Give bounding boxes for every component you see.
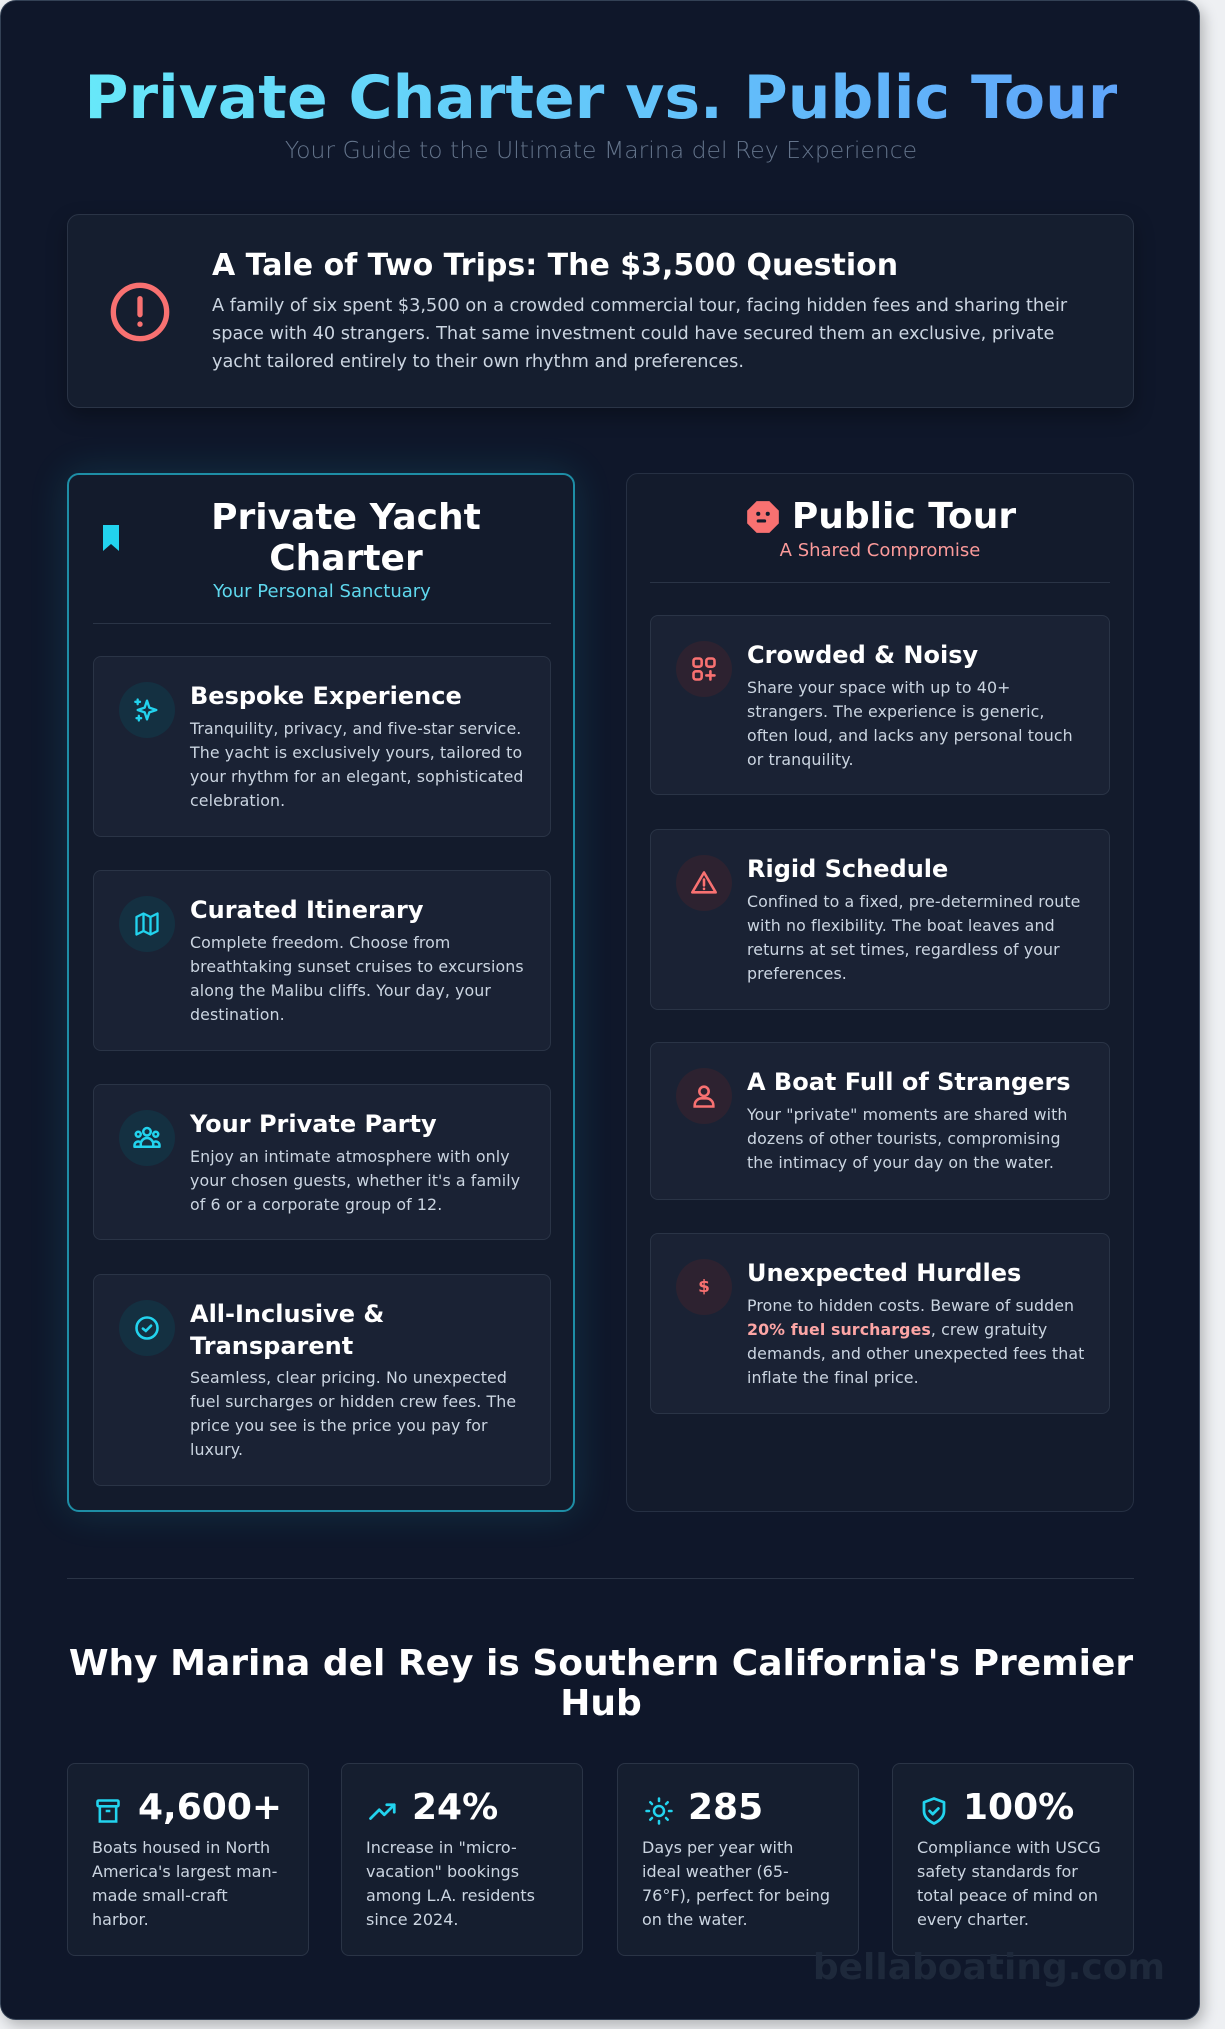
stat: boats: Boats housed in North <box>92 1838 270 1857</box>
left column heading: Private Yacht <box>211 497 481 538</box>
card: crowded & noisy: Crowded & Noisy <box>747 641 978 669</box>
watermark: bellaboating.com <box>813 1947 1165 1988</box>
icon: dollar: $ <box>698 1277 710 1297</box>
card: rigid schedule: Rigid Schedule <box>747 855 948 883</box>
card: crowded & noisy: Share your space with up to 40+ strangers. The experience is generic, often loud, and lacks any personal touch or tranquility. <box>747 678 1073 769</box>
subtitle: Your Guide to the Ultimate Marina del Rey Experience <box>285 136 917 164</box>
section heading: why marina del rey: Why Marina del Rey is Southern California's Premier <box>69 1643 1133 1684</box>
stat: micro-vacation: Increase in "micro- <box>366 1838 517 1857</box>
card: rigid schedule: Confined to a fixed, pre-determined route with no flexibility. The boat leaves and returns at set times, regardless of your preferences. <box>747 892 1080 983</box>
icon: shield check <box>922 1797 946 1825</box>
stat: boats: made small-craft <box>92 1886 228 1905</box>
card: bespoke experience: Bespoke Experience <box>190 682 462 710</box>
card: curated itinerary <box>93 870 551 1051</box>
icon: alert circle <box>110 282 170 342</box>
card: strangers: A Boat Full of Strangers <box>747 1068 1071 1096</box>
card: all-inclusive: Seamless, clear pricing. No unexpected fuel surcharges or hidden crew fees. The price you see is the price you pay for luxury. <box>190 1368 516 1459</box>
story text: A family of six spent $3,500 on a crowded commercial tour, facing hidden fees and sharing their space with 40 strangers. That same investment could have secured them an exclusive, private yacht tailored entirely to their own rhythm and preferences. <box>212 296 1067 372</box>
stat: boats: America's largest man- <box>92 1862 277 1881</box>
title: Private Charter vs. Public Tour <box>85 63 1117 133</box>
stat: weather days: 76°F), perfect for being <box>642 1886 830 1905</box>
section heading: why marina del rey: Hub <box>560 1683 642 1724</box>
stat: weather days: ideal weather (65- <box>642 1862 789 1881</box>
stat: boats: 4,600+ <box>138 1787 282 1828</box>
card: all-inclusive: All-Inclusive & <box>190 1300 384 1328</box>
stat: weather days: Days per year with <box>642 1838 793 1857</box>
card: strangers <box>650 1042 1110 1200</box>
left column heading <box>211 497 481 579</box>
stat: weather days: 285 <box>688 1787 763 1828</box>
story heading: A Tale of Two Trips: The $3,500 Question <box>212 248 898 283</box>
card: private party <box>93 1084 551 1240</box>
icon: archive <box>96 1799 120 1823</box>
public tour heading with icon: Public Tour <box>792 496 1016 537</box>
icon: user <box>676 1068 732 1124</box>
icon: grid plus <box>676 641 732 697</box>
stat: micro-vacation: among L.A. residents <box>366 1886 535 1905</box>
icon: trending up <box>369 1803 396 1820</box>
left column subtitle: Your Personal Sanctuary <box>213 581 431 602</box>
stat: compliance: safety standards for <box>917 1862 1078 1881</box>
stat: compliance: 100% <box>963 1787 1074 1828</box>
card: bespoke experience: Tranquility, privacy, and five-star service. The yacht is exclusively yours, tailored to your rhythm for an elegant, sophisticated celebration. <box>190 719 524 810</box>
card: private party: Enjoy an intimate atmosphere with only your chosen guests, whether it's a family of 6 or a corporate group of 12. <box>190 1147 520 1214</box>
stat: compliance: every charter. <box>917 1910 1029 1929</box>
card: bespoke experience <box>93 656 551 837</box>
card: private party: Your Private Party <box>190 1110 437 1138</box>
stat: micro-vacation: vacation" bookings <box>366 1862 519 1881</box>
panel: public tour <box>626 473 1134 1512</box>
stat: micro-vacation: since 2024. <box>366 1910 458 1929</box>
left column heading: Charter <box>269 538 423 579</box>
card: unexpected hurdles <box>650 1233 1110 1414</box>
stat: weather days <box>617 1763 859 1956</box>
icon: users <box>119 1110 175 1166</box>
card: curated itinerary: Complete freedom. Choose from breathtaking sunset cruises to excursions along the Malibu cliffs. Your day, your destination. <box>190 933 524 1024</box>
stat: weather days: on the water. <box>642 1910 748 1929</box>
right column subtitle: A Shared Compromise <box>780 540 980 561</box>
card: unexpected hurdles: Unexpected Hurdles <box>747 1259 1021 1287</box>
card: all-inclusive: Transparent <box>190 1332 353 1360</box>
icon: sparkles <box>119 682 175 738</box>
panel: story callout <box>67 214 1134 408</box>
icon: red badge <box>747 501 779 533</box>
stat: compliance <box>892 1763 1134 1956</box>
card: curated itinerary: Curated Itinerary <box>190 896 424 924</box>
icon: check circle <box>119 1300 175 1356</box>
card: all-inclusive <box>93 1274 551 1486</box>
icon: sun <box>645 1797 673 1825</box>
stat: boats: harbor. <box>92 1910 149 1929</box>
icon: bookmark <box>103 525 119 551</box>
stat: micro-vacation <box>341 1763 583 1956</box>
stat: boats <box>67 1763 309 1956</box>
card: strangers: Your "private" moments are shared with dozens of other tourists, compromising the intimacy of your day on the water. <box>747 1105 1068 1172</box>
icon: warning triangle <box>676 855 732 911</box>
panel: private yacht charter <box>67 473 575 1512</box>
stat: compliance: Compliance with USCG <box>917 1838 1101 1857</box>
icon: dollar <box>676 1259 732 1315</box>
stat: micro-vacation: 24% <box>412 1787 498 1828</box>
card: rigid schedule <box>650 829 1110 1010</box>
section heading: why marina del rey <box>69 1643 1134 1724</box>
card: crowded & noisy <box>650 615 1110 795</box>
stat: compliance: total peace of mind on <box>917 1886 1098 1905</box>
card: unexpected hurdles: Prone to hidden costs. Beware of sudden 20% fuel surcharges, crew gratuity demands, and other unexpected fees that inflate the final price. <box>747 1296 1084 1387</box>
icon: map <box>119 896 175 952</box>
